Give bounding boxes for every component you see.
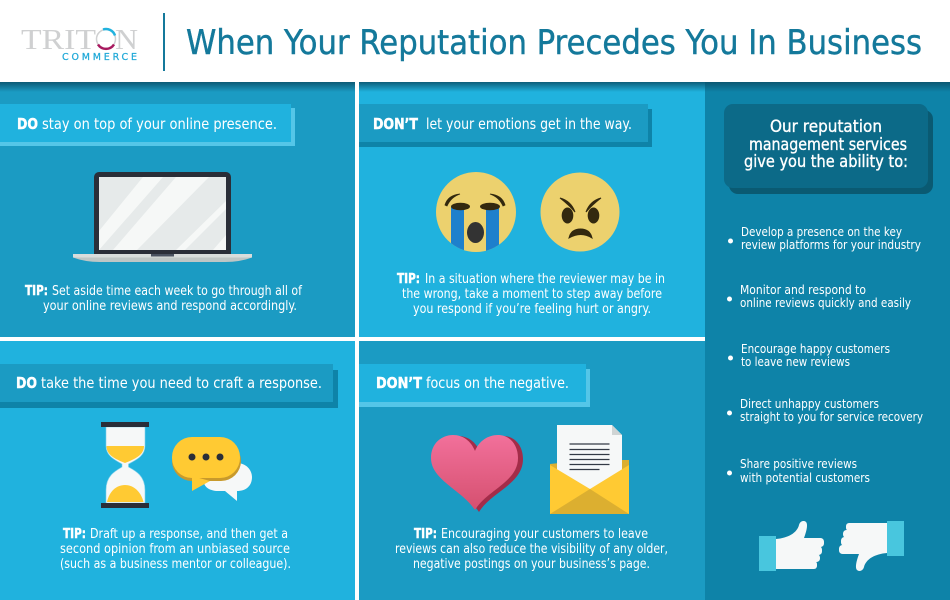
tip text (60, 527, 291, 572)
list item 3 (728, 342, 890, 369)
list item 4: straight to you for service recovery (740, 410, 923, 424)
sidebar heading box (724, 104, 933, 194)
icon: angry face (540, 172, 620, 252)
tip text: (such as a business mentor or colleague). (60, 557, 291, 572)
tip text: TIP: (25, 284, 48, 299)
tip text (25, 284, 302, 314)
header (0, 0, 950, 82)
banner (359, 364, 590, 407)
banner: DO (16, 374, 37, 392)
icon: hourglass (101, 422, 149, 508)
panel: don't let emotions (359, 82, 705, 337)
list item 1 (728, 225, 921, 252)
icon: thumbs up (759, 521, 824, 571)
tip text (395, 527, 668, 572)
list item 3: to leave new reviews (741, 355, 850, 369)
list item 3: Encourage happy customers (741, 342, 890, 356)
tip text: second opinion from an unbiased source (60, 542, 290, 557)
tip text: Draft up a response, and then get a (90, 527, 288, 542)
logo: Triton Commerce: TRIT (21, 24, 96, 56)
list item 5: with potential customers (740, 471, 870, 485)
banner (359, 104, 652, 147)
list item 5 (727, 457, 870, 485)
panel: do take the time (0, 341, 355, 600)
list item 4: Direct unhappy customers (740, 397, 879, 411)
tip text: your online reviews and respond accordingly. (43, 299, 297, 314)
banner: DON’T (373, 115, 419, 133)
panel: services sidebar (705, 82, 950, 600)
panel: don't focus on negative (359, 341, 705, 600)
logo: Triton Commerce: COMMERCE (62, 52, 137, 63)
list item 2: online reviews quickly and easily (740, 296, 911, 310)
tip text: negative postings on your business’s page. (413, 557, 650, 572)
tip text: TIP: (397, 272, 420, 287)
panel: do stay on top (0, 82, 355, 337)
banner: focus on the negative. (426, 374, 569, 392)
sidebar heading box: give you the ability to: (744, 152, 908, 171)
logo: Triton Commerce (21, 24, 138, 63)
list item 2: Monitor and respond to (740, 283, 866, 297)
banner: DO (17, 115, 38, 133)
banner: take the time you need to craft a response. (41, 374, 322, 392)
banner: DON’T (376, 374, 423, 392)
sidebar heading box: management services (749, 135, 907, 154)
icon: crying face (436, 172, 516, 257)
list item 2 (727, 283, 911, 310)
icon: heart (431, 435, 523, 512)
tip text: you respond if you’re feeling hurt or angry. (413, 302, 651, 317)
tip text: Set aside time each week to go through all of (52, 284, 302, 299)
banner (0, 364, 338, 408)
list item 1: review platforms for your industry (741, 238, 921, 252)
sidebar heading box: Our reputation (770, 117, 882, 136)
icon: speech bubbles (172, 437, 252, 501)
banner (0, 104, 295, 146)
tip text: the wrong, take a moment to step away before (402, 287, 662, 302)
tip text: TIP: (414, 527, 437, 542)
tip text (397, 272, 665, 317)
icon: thumbs down (839, 521, 904, 571)
banner: let your emotions get in the way. (426, 115, 632, 133)
banner: stay on top of your online presence. (42, 115, 277, 133)
tip text: reviews can also reduce the visibility of any older, (395, 542, 668, 557)
list item 5: Share positive reviews (740, 457, 857, 471)
logo: Triton Commerce: N (115, 24, 138, 56)
list item 4 (727, 397, 923, 424)
list item 1: Develop a presence on the key (741, 225, 902, 239)
tip text: Encouraging your customers to leave (441, 527, 648, 542)
icon: laptop (73, 172, 252, 262)
tip text: In a situation where the reviewer may be in (425, 272, 665, 287)
tip text: TIP: (63, 527, 86, 542)
icon: envelope with letter (550, 425, 629, 514)
